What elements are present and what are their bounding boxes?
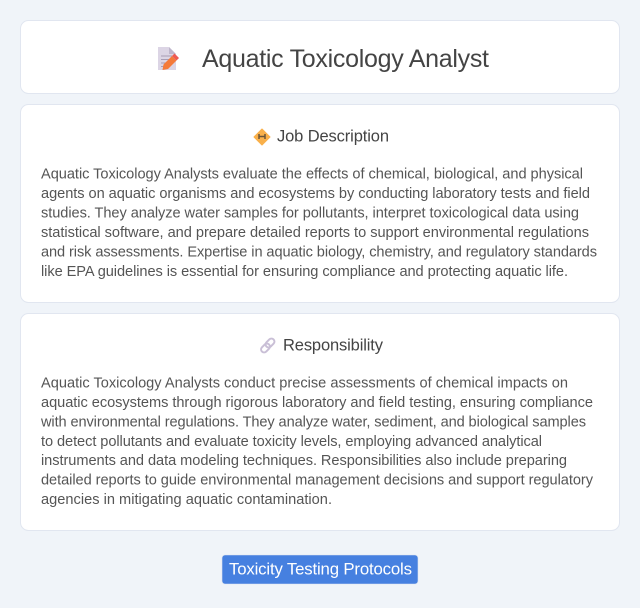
text block: job description: studies. They analyze water samples for pollutants, interpret toxicological data using <box>41 206 579 222</box>
panel: responsibility <box>20 314 620 530</box>
icon: warning diamond <box>254 129 270 145</box>
text block: job description: statistical software, and prepare detailed reports to support environmental regulations <box>41 225 589 241</box>
icon: chain link <box>260 337 276 354</box>
title: Aquatic Toxicology Analyst <box>202 45 489 73</box>
text block: responsibility: aquatic ecosystems through rigorous laboratory and field testing, ensuring compliance <box>41 395 593 411</box>
text block: job description: agents on aquatic organisms and ecosystems by conducting laboratory tests and field <box>41 186 590 202</box>
heading: responsibility: Responsibility <box>283 336 384 354</box>
button: toxicity testing protocols: Toxicity Testing Protocols <box>229 560 412 578</box>
text block: job description: and risk assessments. Expertise in aquatic biology, chemistry, and regulatory standards <box>41 244 597 260</box>
panel: title card <box>20 20 620 94</box>
text block: responsibility: detailed reports to guide environmental management decisions and support regulatory <box>41 472 594 488</box>
text block: responsibility: with environmental regulations. They analyze water, sediment, and biological samples <box>40 414 586 430</box>
text block: job description: Aquatic Toxicology Analysts evaluate the effects of chemical, biological, and physical <box>41 166 583 182</box>
button: toxicity testing protocols <box>222 555 418 584</box>
text block: responsibility: agencies in mitigating aquatic contamination. <box>41 492 332 508</box>
icon: document with pencil <box>158 47 179 70</box>
text block: responsibility: Aquatic Toxicology Analysts conduct precise assessments of chemical impacts on <box>41 376 568 392</box>
panel: job description <box>20 104 620 302</box>
text block: job description <box>41 166 597 280</box>
text block: job description: like EPA guidelines is essential for ensuring compliance and protecting aquatic life. <box>41 264 568 280</box>
text block: responsibility: instruments and data modeling techniques. Responsibilities also include preparing <box>41 453 567 469</box>
heading: job description: Job Description <box>277 128 389 146</box>
text block: responsibility: to detect pollutants and evaluate toxicity levels, employing advanced analytical <box>41 434 542 450</box>
text block: responsibility <box>40 376 594 508</box>
